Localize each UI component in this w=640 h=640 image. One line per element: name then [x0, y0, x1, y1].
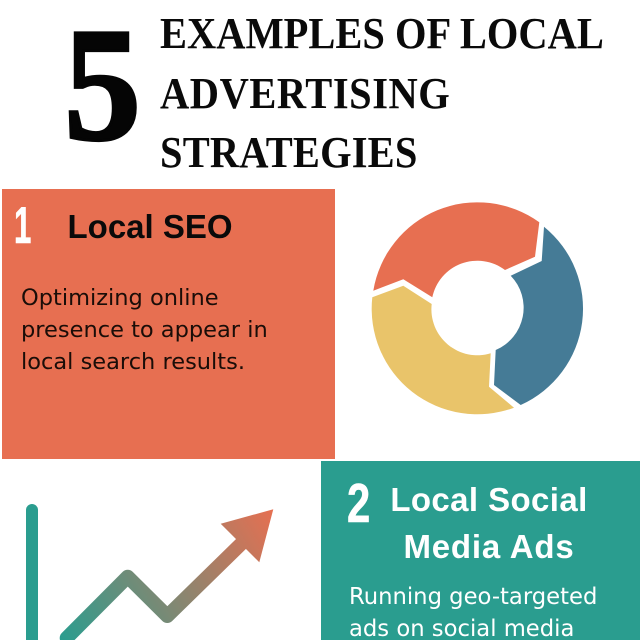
heading: Local Social Media Ads: Local Social	[390, 481, 588, 518]
title	[160, 9, 604, 177]
heading: Local SEO: Local SEO	[68, 208, 233, 245]
chart: growth arrow	[26, 504, 274, 640]
description: Local SEO: local search results.	[21, 349, 245, 375]
description: Local SEO	[21, 285, 268, 375]
panel: Local Social Media Ads	[321, 461, 640, 640]
ring segment: blue	[494, 227, 583, 405]
title: EXAMPLES OF LOCAL	[160, 9, 604, 58]
vertical axis	[26, 510, 38, 640]
title: STRATEGIES	[160, 128, 418, 177]
heading: Local Social Media Ads	[390, 481, 588, 565]
number 2: 2	[346, 472, 370, 534]
panel: Local SEO	[2, 189, 335, 459]
description: Local SEO: presence to appear in	[21, 317, 268, 343]
trend line	[67, 542, 243, 638]
heading: Local Social Media Ads: Media Ads	[403, 528, 574, 565]
ring segment: yellow	[372, 286, 514, 414]
arrowhead	[221, 509, 273, 562]
description: Local Social Media Ads: Running geo-targeted	[349, 584, 597, 610]
big number 5: 5	[64, 0, 141, 175]
description: Local SEO: Optimizing online	[21, 285, 219, 311]
icon: circular cycle ring	[372, 202, 584, 414]
ring segment: orange	[373, 202, 539, 297]
title: ADVERTISING	[160, 69, 450, 118]
description: Local Social Media Ads	[349, 584, 597, 640]
number 1: 1	[14, 197, 31, 255]
